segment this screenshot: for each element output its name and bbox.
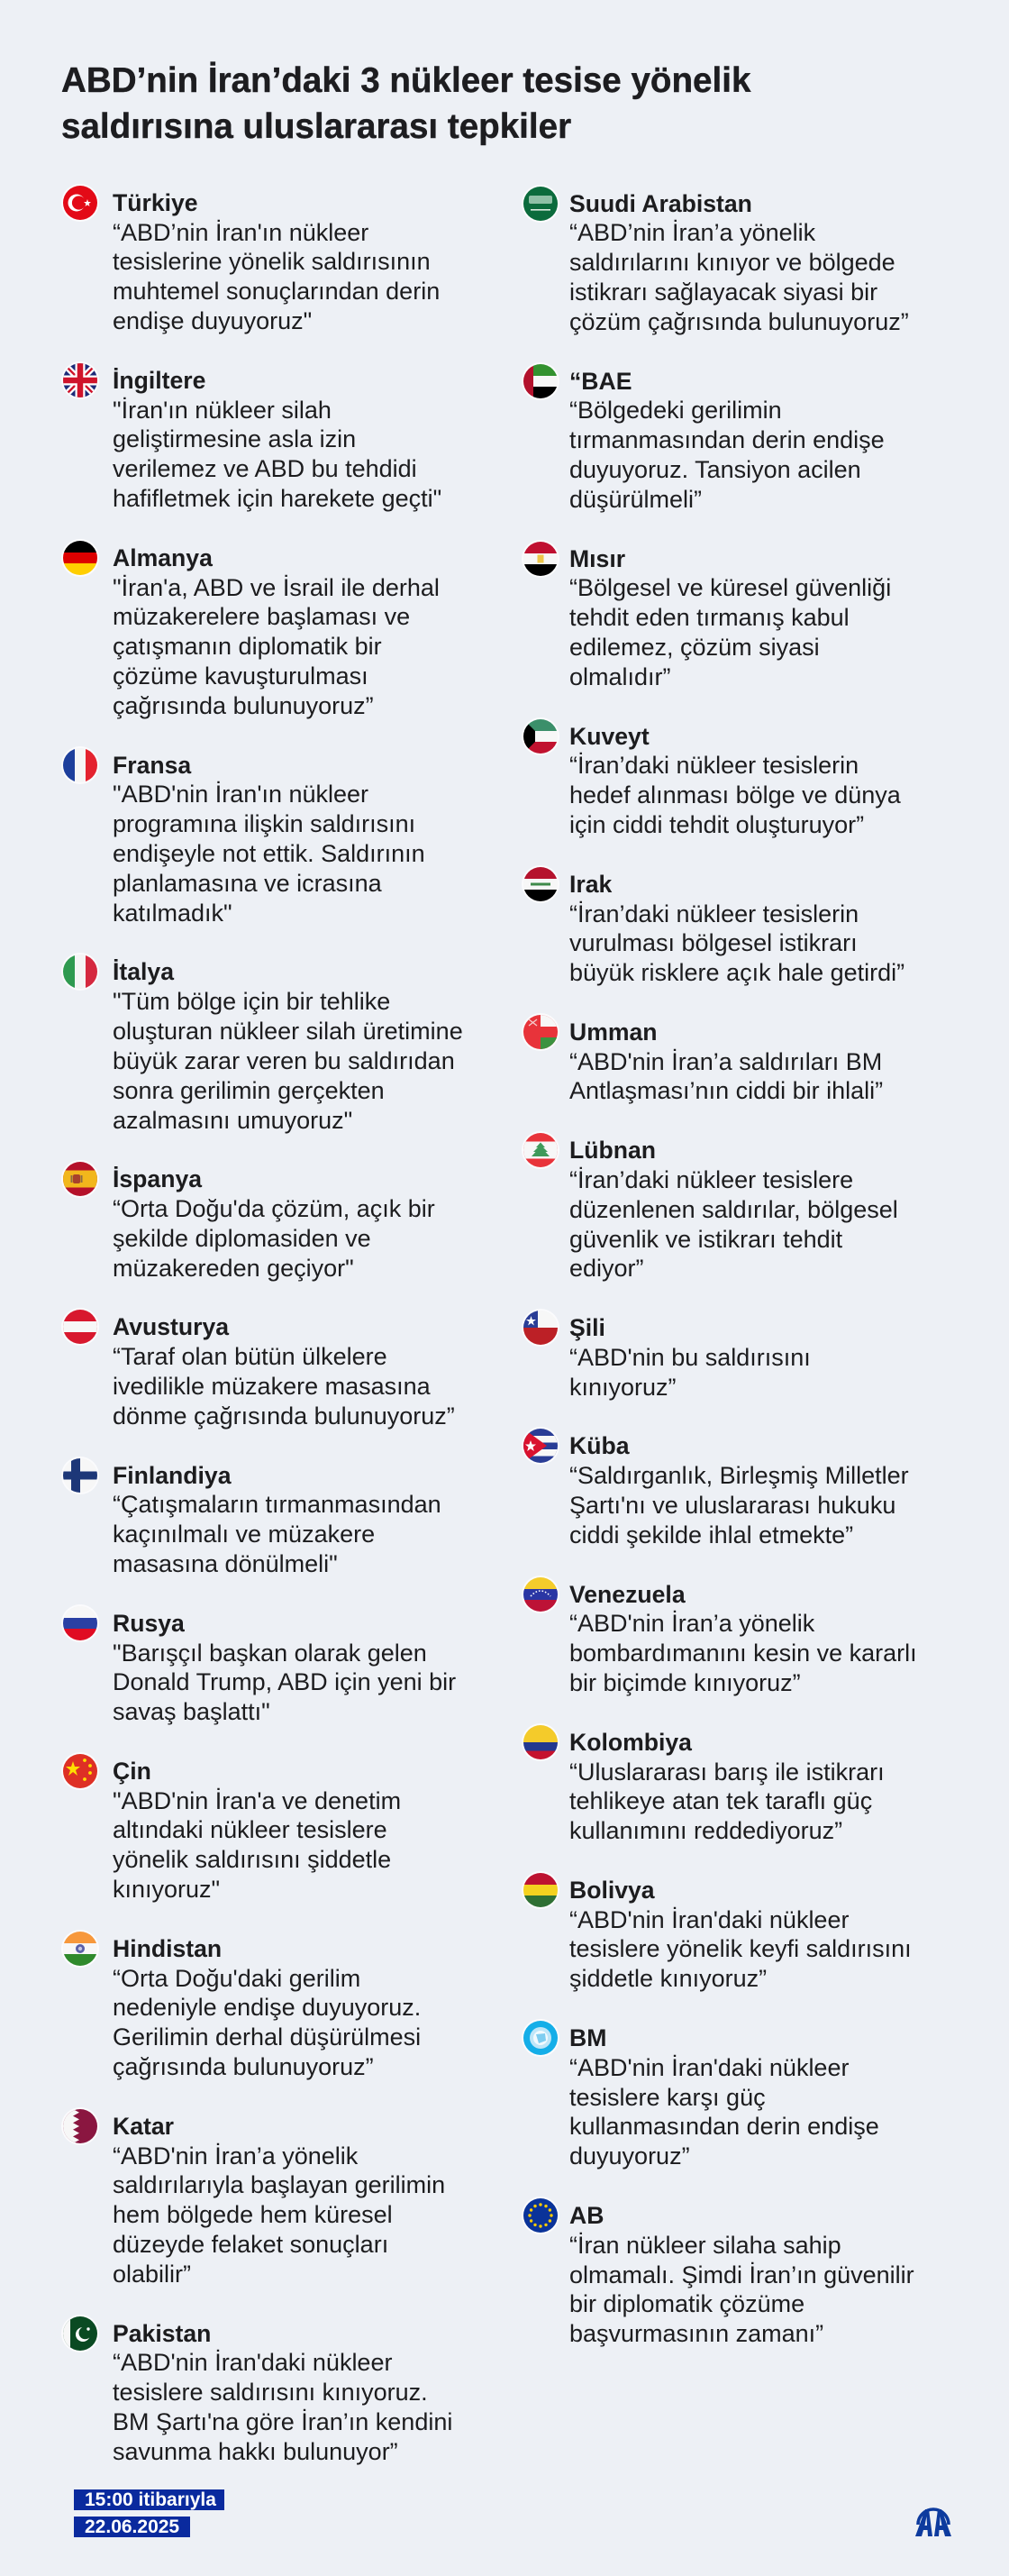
icon: Germany flag: [63, 541, 97, 575]
panel: Avusturya: dönme çağrısında bulunuyoruz”: [113, 1402, 455, 1430]
panel: Çin: Çin: [113, 1758, 151, 1785]
panel: Suudi Arabistan: çözüm çağrısında bulunuyoruz”: [569, 308, 909, 335]
panel: Irak: vurulması bölgesel istikrarı: [569, 929, 858, 956]
icon: UN flag: [523, 2021, 558, 2055]
panel: Lübnan: güvenlik ve istikrarı tehdit: [569, 1226, 842, 1253]
panel: Mısır: [522, 540, 891, 690]
panel: Almanya: "İran'a, ABD ve İsrail ile derhal: [113, 574, 440, 601]
panel: Çin: yönelik saldırısını şiddetle: [113, 1846, 391, 1873]
panel: Pakistan: savunma hakkı bulunuyor”: [113, 2438, 398, 2465]
icon: Saudi Arabia flag: [523, 186, 558, 220]
panel: İtalya: büyük zarar veren bu saldırıdan: [113, 1047, 455, 1074]
panel: Mısır: “Bölgesel ve küresel güvenliği: [569, 574, 891, 601]
panel: Rusya: "Barışçıl başkan olarak gelen: [113, 1640, 427, 1667]
panel: Rusya: Rusya: [113, 1610, 185, 1637]
panel: BAE: [522, 362, 885, 513]
panel: Finlandiya: kaçınılmalı ve müzakere: [113, 1521, 375, 1548]
panel: Lübnan: ediyor”: [569, 1255, 644, 1282]
panel: Küba: “Saldırganlık, Birleşmiş Milletler: [569, 1462, 909, 1489]
panel: Venezuela: Venezuela: [569, 1581, 686, 1608]
panel: Mısır: Mısır: [569, 544, 625, 571]
panel: Umman: Antlaşması’nın ciddi bir ihlali”: [569, 1077, 883, 1104]
icon: Oman flag: [523, 1015, 558, 1049]
panel: İspanya: [61, 1160, 435, 1282]
panel: Avusturya: [61, 1308, 455, 1430]
panel: Bolivya: Bolivya: [569, 1877, 655, 1904]
panel: Şili: “ABD'nin bu saldırısını: [569, 1344, 811, 1371]
panel: Kuveyt: için ciddi tehdit oluşturuyor”: [569, 811, 864, 838]
panel: Hindistan: “Orta Doğu'daki gerilim: [113, 1965, 360, 1992]
panel: İtalya: sonra gerilimin gerçekten: [113, 1077, 385, 1104]
panel: İtalya: [61, 953, 463, 1134]
icon: Russia flag: [63, 1606, 97, 1640]
panel: Fransa: [61, 746, 425, 927]
icon: France flag: [63, 748, 97, 782]
panel: Küba: ciddi şekilde ihlal etmekte”: [569, 1521, 853, 1548]
panel: Mısır: tehdit eden tırmanış kabul: [569, 604, 850, 631]
panel: Suudi Arabistan: saldırılarını kınıyor ve bölgede: [569, 249, 895, 276]
panel: İngiltere: verilemez ve ABD bu tehdidi: [113, 455, 417, 482]
panel: Fransa: "ABD'nin İran'ın nükleer: [113, 781, 368, 808]
panel: Kuveyt: hedef alınması bölge ve dünya: [569, 781, 901, 808]
label: date: 22.06.2025: [85, 2517, 179, 2537]
panel: Küba: Küba: [569, 1432, 629, 1459]
panel: BM: kullanmasından derin endişe: [569, 2113, 879, 2140]
panel: Venezuela: bir biçimde kınıyoruz”: [569, 1669, 801, 1696]
icon: UK flag: [63, 363, 97, 397]
icon: AA logo: [915, 2507, 951, 2536]
panel: Katar: [61, 2107, 445, 2288]
panel: Almanya: çatışmanın diplomatik bir: [113, 633, 382, 660]
icon: Finland flag: [63, 1458, 97, 1493]
panel: Şili: Şili: [569, 1314, 605, 1341]
panel: AB: AB: [569, 2202, 604, 2229]
panel: İtalya: oluşturan nükleer silah üretimine: [113, 1018, 463, 1045]
panel: Umman: “ABD'nin İran’a saldırıları BM: [569, 1048, 882, 1075]
panel: AB: [522, 2197, 914, 2347]
panel: Pakistan: Pakistan: [113, 2320, 211, 2347]
panel: Pakistan: BM Şartı'na göre İran’ın kendini: [113, 2408, 452, 2435]
panel: Mısır: olmalıdır”: [569, 663, 671, 690]
panel: İtalya: azalmasını umuyoruz": [113, 1107, 352, 1134]
panel: AB: olmamalı. Şimdi İran’ın güvenilir: [569, 2261, 914, 2288]
icon: Italy flag: [63, 955, 97, 989]
panel: AB: “İran nükleer silaha sahip: [569, 2232, 841, 2259]
panel: Avusturya: “Taraf olan bütün ülkelere: [113, 1343, 387, 1370]
icon: Bolivia flag: [523, 1873, 558, 1907]
panel: Umman: Umman: [569, 1019, 658, 1046]
panel: BAE: tırmanmasından derin endişe: [569, 426, 885, 453]
panel: Küba: Şartı'nı ve uluslararası hukuku: [569, 1492, 895, 1519]
panel: İngiltere: geliştirmesine asla izin: [113, 425, 356, 452]
panel: Bolivya: tesislere yönelik keyfi saldırısını: [569, 1935, 912, 1962]
icon: Iraq flag: [523, 867, 558, 901]
panel: Katar: düzeyde felaket sonuçları: [113, 2231, 388, 2258]
panel: Kolombiya: tehlikeye atan tek taraflı güç: [569, 1787, 872, 1814]
panel: Finlandiya: masasına dönülmeli": [113, 1550, 338, 1577]
panel: Kuveyt: Kuveyt: [569, 723, 650, 750]
panel: Venezuela: [522, 1576, 917, 1696]
panel: AB: bir diplomatik çözüme: [569, 2290, 804, 2317]
panel: Suudi Arabistan: “ABD’nin İran’a yönelik: [569, 219, 815, 246]
panel: Katar: “ABD'nin İran’a yönelik: [113, 2142, 358, 2170]
panel: Türkiye: endişe duyuyoruz": [113, 307, 312, 334]
panel: Suudi Arabistan: [522, 185, 909, 335]
icon: China flag: [63, 1754, 97, 1788]
panel: BM: “ABD'nin İran'daki nükleer: [569, 2054, 849, 2081]
panel: Çin: kınıyoruz": [113, 1876, 220, 1903]
panel: Venezuela: bombardımanını kesin ve kararlı: [569, 1640, 917, 1667]
panel: Mısır: edilemez, çözüm siyasi: [569, 634, 820, 661]
panel: Lübnan: düzenlenen saldırılar, bölgesel: [569, 1196, 898, 1223]
panel: Pakistan: [61, 2315, 452, 2465]
icon: Lebanon flag: [523, 1133, 558, 1167]
panel: Türkiye: tesislerine yönelik saldırısının: [113, 248, 431, 275]
panel: Fransa: programına ilişkin saldırısını: [113, 810, 415, 837]
panel: BAE: düşürülmeli”: [569, 486, 702, 513]
panel: İngiltere: [61, 361, 441, 512]
panel: Rusya: savaş başlattı": [113, 1698, 270, 1725]
panel: Lübnan: [522, 1131, 898, 1282]
icon: Venezuela flag: [523, 1577, 558, 1612]
label: time: 15:00 itibarıyla: [85, 2489, 216, 2510]
panel: Katar: hem bölgede hem küresel: [113, 2201, 393, 2228]
panel: İspanya: İspanya: [113, 1165, 202, 1192]
icon: Chile flag: [523, 1311, 558, 1345]
panel: Çin: "ABD'nin İran'a ve denetim: [113, 1787, 401, 1814]
panel: Almanya: Almanya: [113, 544, 213, 571]
panel: Irak: büyük risklere açık hale getirdi”: [569, 959, 904, 986]
panel: BAE: duyuyoruz. Tansiyon acilen: [569, 456, 861, 483]
panel: Bolivya: şiddetle kınıyoruz”: [569, 1965, 767, 1992]
icon: Pakistan flag: [63, 2316, 97, 2351]
panel: Finlandiya: [61, 1457, 441, 1577]
panel: İngiltere: hafifletmek için harekete geçti": [113, 485, 441, 512]
panel: Almanya: [61, 539, 440, 719]
panel: BAE: “BAE: [569, 368, 632, 395]
icon: Qatar flag: [63, 2109, 97, 2143]
panel: Türkiye: [61, 184, 440, 334]
panel: İtalya: "Tüm bölge için bir tehlike: [113, 988, 390, 1015]
panel: Hindistan: nedeniyle endişe duyuyoruz.: [113, 1994, 421, 2021]
panel: Irak: Irak: [569, 871, 612, 898]
panel: Irak: [522, 865, 904, 986]
panel: Katar: Katar: [113, 2113, 174, 2140]
panel: Fransa: katılmadık": [113, 900, 232, 927]
panel: Avusturya: Avusturya: [113, 1313, 229, 1340]
panel: AB: başvurmasının zamanı”: [569, 2320, 823, 2347]
panel: Irak: “İran’daki nükleer tesislerin: [569, 900, 859, 927]
panel: Almanya: müzakerelere başlaması ve: [113, 603, 410, 630]
panel: Rusya: Donald Trump, ABD için yeni bir: [113, 1668, 456, 1695]
icon: EU flag: [523, 2198, 558, 2233]
panel: İspanya: müzakereden geçiyor": [113, 1255, 354, 1282]
icon: India flag: [63, 1932, 97, 1966]
title: saldırısına uluslararası tepkiler: [61, 107, 571, 146]
panel: Almanya: çağrısında bulunuyoruz”: [113, 692, 374, 719]
panel: İtalya: İtalya: [113, 958, 174, 985]
panel: Şili: [522, 1309, 811, 1401]
panel: Pakistan: tesislere saldırısını kınıyoruz.: [113, 2379, 428, 2406]
panel: Çin: altındaki nükleer tesislere: [113, 1816, 387, 1843]
panel: BM: [522, 2019, 879, 2170]
panel: BM: duyuyoruz”: [569, 2142, 690, 2170]
panel: Kuveyt: “İran’daki nükleer tesislerin: [569, 752, 859, 779]
icon: Turkey flag: [63, 186, 97, 220]
title: ABD’nin İran’daki 3 nükleer tesise yönelik: [61, 61, 750, 100]
panel: Hindistan: Gerilimin derhal düşürülmesi: [113, 2023, 421, 2051]
panel: BAE: “Bölgedeki gerilimin: [569, 397, 782, 424]
panel: Umman: [522, 1013, 883, 1104]
panel: Türkiye: muhtemel sonuçlarından derin: [113, 278, 440, 305]
panel: Bolivya: [522, 1871, 912, 1992]
icon: UAE flag: [523, 364, 558, 398]
panel: Lübnan: Lübnan: [569, 1137, 656, 1164]
panel: Suudi Arabistan: istikrarı sağlayacak siyasi bir: [569, 279, 877, 306]
panel: Kolombiya: “Uluslararası barış ile istikrarı: [569, 1758, 885, 1786]
panel: Rusya: [61, 1604, 456, 1725]
panel: Finlandiya: Finlandiya: [113, 1462, 232, 1489]
panel: BM: BM: [569, 2024, 606, 2051]
panel: Almanya: çözüme kavuşturulması: [113, 662, 368, 690]
panel: Küba: [522, 1427, 909, 1548]
panel: Kolombiya: kullanımını reddediyoruz”: [569, 1817, 842, 1844]
panel: Lübnan: “İran’daki nükleer tesislere: [569, 1166, 853, 1193]
icon: Kuwait flag: [523, 719, 558, 754]
panel: Finlandiya: “Çatışmaların tırmanmasından: [113, 1491, 441, 1518]
panel: Kolombiya: [522, 1723, 885, 1844]
title: [61, 61, 751, 146]
panel: İspanya: şekilde diplomasiden ve: [113, 1225, 371, 1252]
panel: Türkiye: Türkiye: [113, 189, 198, 216]
icon: Colombia flag: [523, 1725, 558, 1759]
panel: Türkiye: “ABD’nin İran'ın nükleer: [113, 219, 368, 246]
icon: Spain flag: [63, 1162, 97, 1196]
panel: Kolombiya: Kolombiya: [569, 1729, 692, 1756]
panel: Hindistan: Hindistan: [113, 1935, 222, 1962]
icon: Cuba flag: [523, 1429, 558, 1463]
panel: Fransa: endişeyle not ettik. Saldırının: [113, 840, 425, 867]
panel: Kuveyt: [522, 717, 901, 838]
panel: Pakistan: “ABD'nin İran'daki nükleer: [113, 2349, 392, 2376]
panel: Bolivya: “ABD'nin İran'daki nükleer: [569, 1906, 849, 1933]
panel: Fransa: Fransa: [113, 752, 191, 779]
panel: İngiltere: İngiltere: [113, 367, 205, 394]
panel: Çin: [61, 1752, 401, 1903]
icon: Austria flag: [63, 1310, 97, 1344]
panel: Katar: saldırılarıyla başlayan gerilimin: [113, 2171, 445, 2198]
panel: Hindistan: çağrısında bulunuyoruz”: [113, 2053, 374, 2080]
panel: Avusturya: ivedilikle müzakere masasına: [113, 1373, 431, 1400]
panel: Hindistan: [61, 1930, 421, 2080]
panel: Fransa: planlamasına ve icrasına: [113, 870, 382, 897]
panel: Katar: olabilir”: [113, 2261, 191, 2288]
panel: Venezuela: “ABD'nin İran’a yönelik: [569, 1610, 814, 1637]
panel: İngiltere: "İran'ın nükleer silah: [113, 397, 332, 424]
panel: BM: tesislere karşı güç: [569, 2084, 766, 2111]
panel: Şili: kınıyoruz”: [569, 1374, 677, 1401]
panel: Suudi Arabistan: Suudi Arabistan: [569, 189, 752, 216]
panel: İspanya: “Orta Doğu'da çözüm, açık bir: [113, 1195, 435, 1222]
icon: Egypt flag: [523, 541, 558, 575]
